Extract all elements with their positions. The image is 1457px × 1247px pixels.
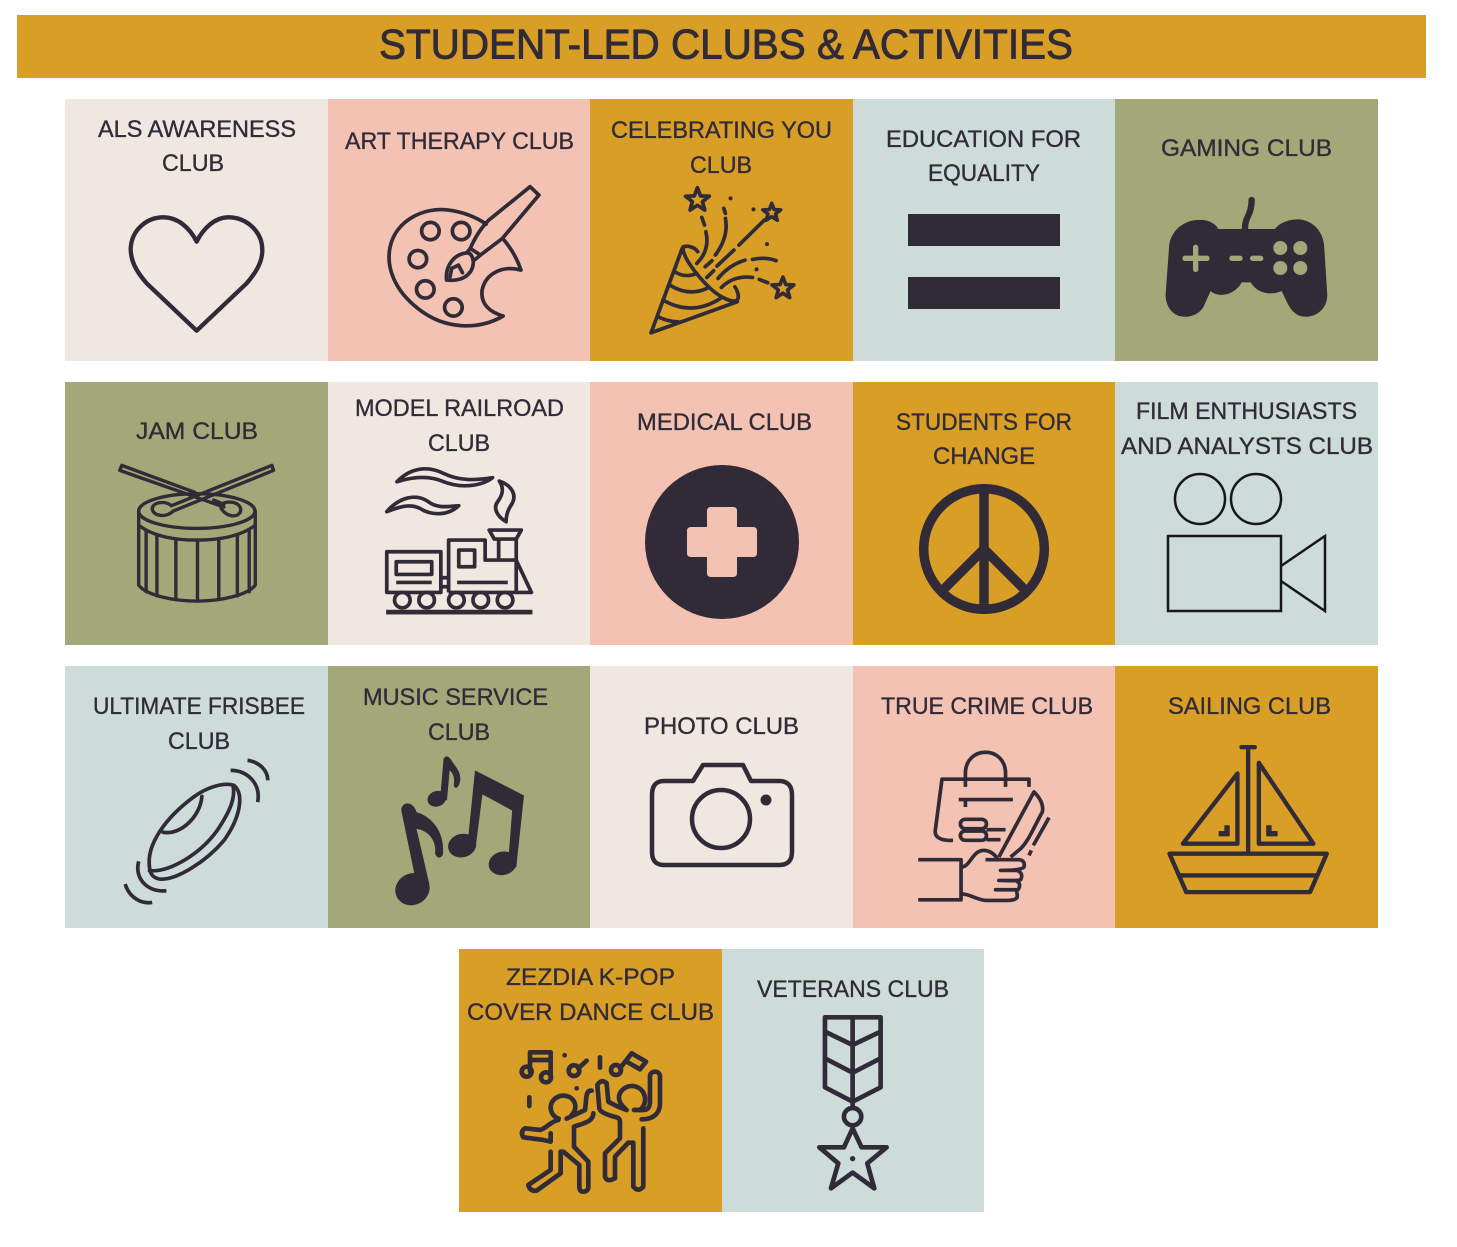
panel: Celebrating You Club (590, 99, 853, 361)
panel: Jam Club (65, 382, 328, 645)
label: Medical Club: MEDICAL CLUB (637, 409, 812, 436)
label: Music Service Club (363, 684, 548, 746)
panel: Sailing Club (1115, 666, 1378, 928)
label: ALS Awareness Club: ALS AWARENESS (98, 116, 296, 143)
label: Music Service Club: MUSIC SERVICE (363, 684, 548, 711)
label: Education for Equality: EQUALITY (928, 160, 1040, 187)
icon: film camera (1168, 474, 1325, 611)
label: Film Enthusiasts and Analysts Club: FILM ENTHUSIASTS (1136, 398, 1357, 425)
label: Education for Equality: EDUCATION FOR (886, 126, 1081, 153)
label: ALS Awareness Club (98, 116, 296, 177)
icon: game controller (1166, 200, 1327, 317)
label: True Crime Club: TRUE CRIME CLUB (881, 693, 1093, 720)
title banner (17, 15, 1426, 78)
title banner: STUDENT-LED CLUBS & ACTIVITIES (379, 20, 1073, 68)
icon: paint palette and brush (389, 187, 539, 326)
label: Celebrating You Club: CLUB (690, 152, 752, 179)
label: Education for Equality (886, 126, 1081, 187)
panel: Music Service Club (328, 666, 590, 928)
label: Ultimate Frisbee Club: CLUB (168, 728, 230, 755)
panel: Zezdia K-Pop Cover Dance Club (459, 949, 722, 1212)
icon: steam locomotive (386, 469, 532, 614)
panel: Gaming Club (1115, 99, 1378, 361)
label: Zezdia K-Pop Cover Dance Club: COVER DANCE CLUB (467, 999, 714, 1026)
icon: peace sign (924, 489, 1044, 609)
label: Art Therapy Club: ART THERAPY CLUB (345, 128, 574, 155)
label: Celebrating You Club (611, 117, 832, 179)
icon: party popper (651, 188, 794, 333)
label: Veterans Club: VETERANS CLUB (757, 976, 949, 1003)
label: Model Railroad Club: CLUB (428, 430, 490, 457)
icon: spinning frisbee (125, 760, 268, 903)
label: Zezdia K-Pop Cover Dance Club: ZEZDIA K-POP (506, 964, 675, 991)
label: Music Service Club: CLUB (428, 719, 490, 746)
label: Gaming Club: GAMING CLUB (1161, 135, 1332, 162)
label: Model Railroad Club (355, 395, 564, 457)
panel: Veterans Club (722, 949, 984, 1212)
label: Zezdia K-Pop Cover Dance Club (467, 964, 714, 1026)
label: Ultimate Frisbee Club (93, 693, 305, 755)
panel: True Crime Club (853, 666, 1115, 928)
label: Students for Change (896, 409, 1072, 470)
icon: music notes (389, 756, 524, 911)
label: Students for Change: STUDENTS FOR (896, 409, 1072, 436)
icon: medical cross (645, 465, 799, 619)
panel: Model Railroad Club (328, 382, 590, 645)
icon: heart (131, 217, 262, 331)
icon: military medal (819, 1017, 887, 1188)
panel: Photo Club (590, 666, 853, 928)
icon: camera (652, 765, 792, 865)
icon: evidence bag and hand with knife (918, 752, 1049, 900)
label: Photo Club: PHOTO CLUB (644, 713, 799, 740)
panel: Students for Change (853, 382, 1115, 645)
label: Students for Change: CHANGE (933, 443, 1035, 470)
icon: sailboat (1170, 747, 1327, 892)
panel: Ultimate Frisbee Club (65, 666, 328, 928)
label: Film Enthusiasts and Analysts Club (1121, 398, 1373, 460)
label: Film Enthusiasts and Analysts Club: AND ANALYSTS CLUB (1121, 433, 1373, 460)
icon: equals sign (908, 214, 1060, 309)
label: Sailing Club: SAILING CLUB (1168, 693, 1331, 720)
panel: Art Therapy Club (328, 99, 590, 361)
label: Ultimate Frisbee Club: ULTIMATE FRISBEE (93, 693, 305, 720)
label: Celebrating You Club: CELEBRATING YOU (611, 117, 832, 144)
label: Jam Club: JAM CLUB (136, 418, 258, 445)
panel: ALS Awareness Club (65, 99, 328, 361)
label: Model Railroad Club: MODEL RAILROAD (355, 395, 564, 422)
label: ALS Awareness Club: CLUB (162, 150, 224, 177)
panel: Medical Club (590, 382, 853, 645)
icon: drum and sticks (120, 465, 274, 601)
panel: Education for Equality (853, 99, 1115, 361)
panel: Film Enthusiasts and Analysts Club (1115, 382, 1378, 645)
icon: dancers and music notes (522, 1052, 660, 1192)
